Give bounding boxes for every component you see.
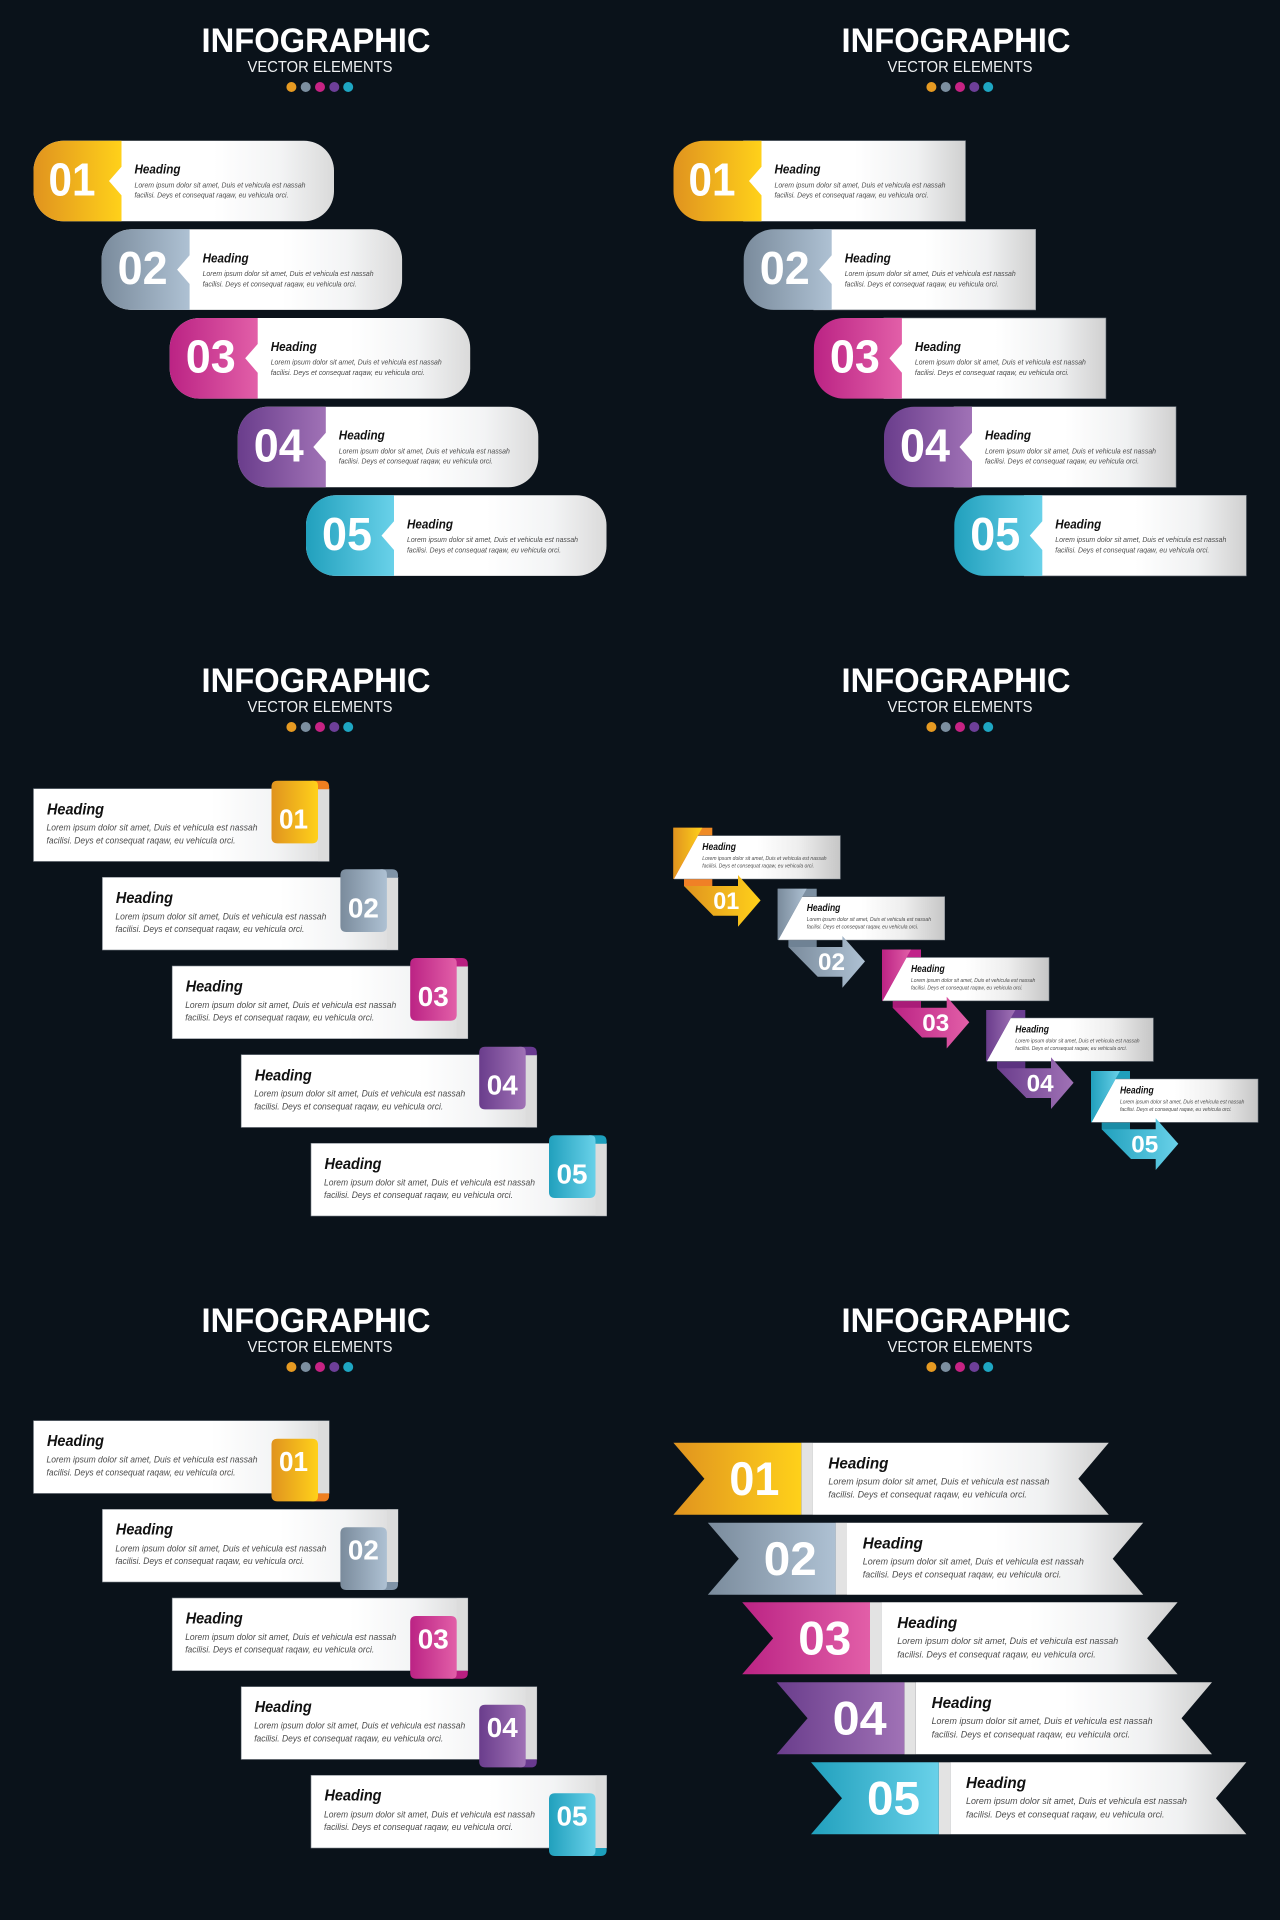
step 03: Heading (897, 1615, 957, 1632)
step 05 (311, 1775, 607, 1856)
step 04: facilisi. Deys et consequat raqaw, eu vehicula orci. (1015, 1046, 1127, 1052)
step 01: 01 (688, 153, 736, 205)
step 05: Lorem ipsum dolor sit amet, Duis et vehicula est nassah (1120, 1099, 1244, 1105)
step 03: 03 (186, 331, 236, 383)
step 03 (172, 958, 468, 1039)
step 01: 01 (48, 153, 96, 205)
step 05: facilisi. Deys et consequat raqaw, eu vehicula orci. (407, 545, 561, 554)
step 01: Lorem ipsum dolor sit amet, Duis et vehicula est nassah (702, 856, 827, 862)
step 01: Lorem ipsum dolor sit amet, Duis et vehicula est nassah (774, 180, 946, 189)
step 02 (778, 889, 945, 988)
step 05: 05 (556, 1801, 588, 1832)
step 02: Heading (116, 1522, 173, 1539)
step 01: 01 (279, 804, 308, 835)
step 04: 04 (900, 419, 950, 471)
step 03: 03 (798, 1612, 851, 1665)
header: top left: VECTOR ELEMENTS (248, 59, 392, 76)
step 04: 04 (487, 1070, 518, 1101)
step 01: Heading (828, 1455, 889, 1472)
step 04 (884, 407, 1176, 487)
step 03 (814, 318, 1106, 399)
step 03: facilisi. Deys et consequat raqaw, eu vehicula orci. (915, 368, 1069, 377)
step 04: Heading (255, 1067, 312, 1084)
step 03 (742, 1602, 1178, 1674)
step 01: Lorem ipsum dolor sit amet, Duis et vehicula est nassah (828, 1476, 1049, 1487)
step 02: Heading (807, 903, 840, 914)
step 04: 04 (833, 1692, 887, 1745)
step 04: 04 (254, 419, 304, 471)
step 04: facilisi. Deys et consequat raqaw, eu vehicula orci. (985, 457, 1139, 466)
step 05: facilisi. Deys et consequat raqaw, eu vehicula orci. (966, 1809, 1164, 1820)
header: top left (202, 22, 430, 92)
step 01: 01 (729, 1452, 779, 1505)
step 03: Lorem ipsum dolor sit amet, Duis et vehicula est nassah (185, 1000, 396, 1010)
step 02: Lorem ipsum dolor sit amet, Duis et vehicula est nassah (807, 917, 931, 923)
step 05: Heading (1120, 1085, 1154, 1096)
header: top right: VECTOR ELEMENTS (888, 59, 1032, 76)
step 02: Lorem ipsum dolor sit amet, Duis et vehicula est nassah (115, 1543, 326, 1553)
panel: ribbon banners (673, 1443, 1246, 1834)
step 02: Heading (116, 890, 173, 907)
header: middle left: VECTOR ELEMENTS (248, 699, 392, 716)
step 05: 05 (970, 508, 1020, 560)
header: bottom right (842, 1302, 1070, 1372)
step 04: Lorem ipsum dolor sit amet, Duis et vehicula est nassah (339, 446, 510, 455)
step 01: facilisi. Deys et consequat raqaw, eu vehicula orci. (828, 1490, 1027, 1501)
step 02: facilisi. Deys et consequat raqaw, eu vehicula orci. (115, 1556, 304, 1566)
step 02: facilisi. Deys et consequat raqaw, eu vehicula orci. (845, 279, 999, 288)
step 05: 05 (556, 1158, 588, 1189)
step 02: facilisi. Deys et consequat raqaw, eu vehicula orci. (807, 925, 918, 931)
step 05: facilisi. Deys et consequat raqaw, eu vehicula orci. (324, 1190, 513, 1200)
step 01 (673, 1443, 1109, 1515)
step 05: facilisi. Deys et consequat raqaw, eu vehicula orci. (324, 1822, 513, 1832)
step 03 (172, 1598, 468, 1679)
step 02: Lorem ipsum dolor sit amet, Duis et vehicula est nassah (863, 1556, 1084, 1567)
header: middle right: VECTOR ELEMENTS (888, 699, 1032, 716)
header: bottom right: VECTOR ELEMENTS (888, 1339, 1032, 1356)
step 03: Heading (186, 1610, 243, 1627)
panel: rounded pill steps (34, 141, 606, 576)
step 05 (306, 495, 606, 576)
step 02 (708, 1523, 1143, 1595)
step 02: 02 (760, 242, 810, 294)
step 01: Heading (47, 801, 104, 818)
header: top left: INFOGRAPHIC (202, 22, 430, 60)
step 04: Lorem ipsum dolor sit amet, Duis et vehicula est nassah (1015, 1038, 1140, 1044)
step 05: Lorem ipsum dolor sit amet, Duis et vehicula est nassah (324, 1177, 535, 1187)
header: middle left: INFOGRAPHIC (202, 662, 430, 700)
step 01: Heading (702, 842, 736, 853)
panel: bottom-fold tag cards (34, 1421, 607, 1856)
step 03 (882, 950, 1049, 1048)
step 01 (673, 828, 840, 927)
step 03: facilisi. Deys et consequat raqaw, eu vehicula orci. (897, 1649, 1096, 1660)
header: middle right (842, 662, 1070, 732)
step 02: Heading (863, 1535, 923, 1552)
step 05 (811, 1762, 1246, 1834)
step 03: facilisi. Deys et consequat raqaw, eu vehicula orci. (185, 1013, 374, 1023)
step 01: facilisi. Deys et consequat raqaw, eu vehicula orci. (46, 835, 236, 845)
step 04: Heading (339, 428, 385, 443)
header: bottom left: INFOGRAPHIC (202, 1302, 430, 1340)
step 03: Heading (915, 339, 961, 354)
header: bottom left (202, 1302, 430, 1372)
step 02: Heading (845, 250, 891, 265)
step 03: 03 (418, 1623, 449, 1654)
step 05: Heading (966, 1775, 1026, 1792)
step 02: facilisi. Deys et consequat raqaw, eu vehicula orci. (203, 279, 357, 288)
step 02: 02 (118, 242, 168, 294)
step 02 (744, 229, 1036, 310)
step 01 (34, 141, 334, 221)
step 02: 02 (818, 949, 845, 976)
header: top right (842, 22, 1070, 92)
step 03: 03 (418, 981, 449, 1012)
step 04: Heading (985, 428, 1031, 443)
panel: left-rounded tab steps (674, 141, 1246, 576)
step 04: Lorem ipsum dolor sit amet, Duis et vehicula est nassah (254, 1089, 465, 1099)
step 03: facilisi. Deys et consequat raqaw, eu vehicula orci. (271, 368, 425, 377)
step 05: 05 (867, 1772, 920, 1825)
panel: folded arrow steps (673, 828, 1258, 1170)
step 03: 03 (830, 331, 880, 383)
step 01: 01 (279, 1446, 308, 1477)
step 04: 04 (487, 1712, 518, 1743)
step 02: Lorem ipsum dolor sit amet, Duis et vehicula est nassah (115, 911, 326, 921)
step 01: facilisi. Deys et consequat raqaw, eu vehicula orci. (134, 191, 288, 200)
step 05 (1091, 1071, 1258, 1170)
step 05: Heading (324, 1788, 382, 1805)
step 02 (102, 1509, 398, 1590)
step 01 (34, 1421, 329, 1501)
header: bottom left: VECTOR ELEMENTS (248, 1339, 392, 1356)
step 05: facilisi. Deys et consequat raqaw, eu vehicula orci. (1120, 1107, 1232, 1113)
step 04 (238, 407, 538, 487)
step 03: Heading (911, 964, 945, 975)
step 05: Lorem ipsum dolor sit amet, Duis et vehicula est nassah (966, 1796, 1187, 1807)
step 04: Lorem ipsum dolor sit amet, Duis et vehicula est nassah (254, 1721, 465, 1731)
step 05 (954, 495, 1246, 576)
header: middle right: INFOGRAPHIC (842, 662, 1070, 700)
step 05: Heading (324, 1156, 382, 1173)
step 04: Heading (932, 1695, 992, 1712)
step 03: 03 (922, 1010, 949, 1037)
step 03: Heading (186, 979, 243, 996)
step 05: facilisi. Deys et consequat raqaw, eu vehicula orci. (1055, 545, 1209, 554)
step 02: 02 (764, 1532, 817, 1585)
step 01 (674, 141, 966, 221)
step 04: Lorem ipsum dolor sit amet, Duis et vehicula est nassah (932, 1716, 1153, 1727)
step 02: facilisi. Deys et consequat raqaw, eu vehicula orci. (863, 1570, 1061, 1581)
step 01 (34, 781, 329, 861)
step 03: facilisi. Deys et consequat raqaw, eu vehicula orci. (185, 1645, 374, 1655)
step 03: facilisi. Deys et consequat raqaw, eu vehicula orci. (911, 986, 1023, 992)
step 04: Heading (1015, 1024, 1049, 1035)
step 04 (777, 1682, 1212, 1754)
step 02 (102, 229, 402, 310)
step 01: Lorem ipsum dolor sit amet, Duis et vehicula est nassah (46, 1455, 258, 1465)
step 05: 05 (322, 508, 372, 560)
header: top right: INFOGRAPHIC (842, 22, 1070, 60)
step 04 (986, 1010, 1153, 1109)
step 02: 02 (348, 892, 379, 923)
step 01: Heading (774, 162, 821, 177)
step 03: Lorem ipsum dolor sit amet, Duis et vehicula est nassah (915, 358, 1086, 367)
step 01: 01 (713, 888, 739, 915)
step 05 (311, 1135, 607, 1216)
step 02: 02 (348, 1535, 379, 1566)
step 05: Lorem ipsum dolor sit amet, Duis et vehicula est nassah (1055, 535, 1226, 544)
step 01: Lorem ipsum dolor sit amet, Duis et vehicula est nassah (46, 823, 258, 833)
step 01: facilisi. Deys et consequat raqaw, eu vehicula orci. (46, 1467, 236, 1477)
step 01: Heading (47, 1433, 104, 1450)
step 03: Lorem ipsum dolor sit amet, Duis et vehicula est nassah (185, 1632, 396, 1642)
step 01: Heading (134, 162, 181, 177)
step 05: Heading (407, 516, 453, 531)
step 05: Lorem ipsum dolor sit amet, Duis et vehicula est nassah (324, 1809, 535, 1819)
step 04: facilisi. Deys et consequat raqaw, eu vehicula orci. (932, 1729, 1130, 1740)
step 04: facilisi. Deys et consequat raqaw, eu vehicula orci. (254, 1733, 443, 1743)
step 04 (241, 1687, 537, 1767)
step 03: Lorem ipsum dolor sit amet, Duis et vehicula est nassah (897, 1636, 1118, 1647)
step 01: facilisi. Deys et consequat raqaw, eu vehicula orci. (702, 864, 814, 870)
step 01: facilisi. Deys et consequat raqaw, eu vehicula orci. (774, 191, 928, 200)
step 04: facilisi. Deys et consequat raqaw, eu vehicula orci. (339, 457, 493, 466)
step 02: Lorem ipsum dolor sit amet, Duis et vehicula est nassah (203, 269, 374, 278)
step 03: Lorem ipsum dolor sit amet, Duis et vehicula est nassah (271, 358, 442, 367)
step 03: Heading (271, 339, 317, 354)
step 04: Lorem ipsum dolor sit amet, Duis et vehicula est nassah (985, 446, 1156, 455)
step 04: 04 (1027, 1070, 1054, 1097)
step 05: Lorem ipsum dolor sit amet, Duis et vehicula est nassah (407, 535, 578, 544)
panel: top-fold tag cards (34, 781, 607, 1216)
step 03: Lorem ipsum dolor sit amet, Duis et vehicula est nassah (911, 978, 1035, 984)
step 04 (241, 1047, 537, 1127)
step 03 (170, 318, 470, 399)
step 01: Lorem ipsum dolor sit amet, Duis et vehicula est nassah (134, 180, 306, 189)
header: bottom right: INFOGRAPHIC (842, 1302, 1070, 1340)
step 05: Heading (1055, 516, 1101, 531)
step 02: Lorem ipsum dolor sit amet, Duis et vehicula est nassah (845, 269, 1016, 278)
step 02: facilisi. Deys et consequat raqaw, eu vehicula orci. (115, 924, 304, 934)
header: middle left (202, 662, 430, 732)
step 02: Heading (203, 250, 249, 265)
step 04: facilisi. Deys et consequat raqaw, eu vehicula orci. (254, 1101, 443, 1111)
step 04: Heading (255, 1699, 312, 1716)
step 05: 05 (1131, 1131, 1158, 1158)
step 02 (102, 869, 398, 950)
